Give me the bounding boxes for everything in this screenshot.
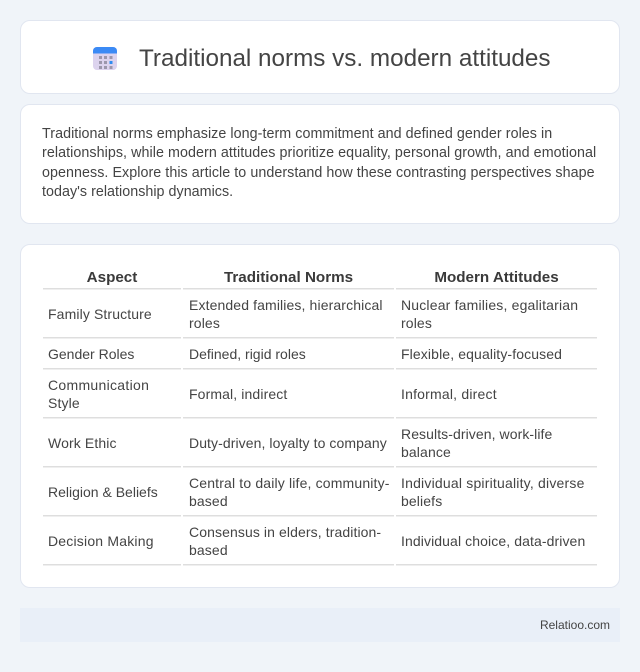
- icon: calendar: [93, 47, 117, 70]
- table: comparison: Flexible, equality-focused: [401, 346, 562, 362]
- row: Work Ethic: Work Ethic: [48, 435, 117, 451]
- row: Communication Style: Communication: [48, 377, 149, 393]
- table: comparison: Informal, direct: [401, 386, 497, 402]
- row: Gender Roles: Gender Roles: [48, 346, 134, 362]
- table: comparison: Results-driven, work-life: [401, 426, 552, 442]
- panel: introduction: [20, 104, 620, 224]
- table: comparison: Extended families, hierarchical: [189, 297, 383, 313]
- table: comparison: roles: [189, 315, 220, 331]
- text block: introduction: today's relationship dynamics.: [42, 184, 233, 200]
- table: comparison: Duty-driven, loyalty to company: [189, 435, 387, 451]
- table: comparison: Style: [48, 395, 80, 411]
- panel: title card: [20, 20, 620, 94]
- row: Religion & Beliefs: Religion & Beliefs: [48, 484, 158, 500]
- table: comparison: roles: [401, 315, 432, 331]
- table: comparison: Nuclear families, egalitarian: [401, 297, 578, 313]
- table: comparison: balance: [401, 444, 451, 460]
- table: comparison: Individual choice, data-driven: [401, 533, 585, 549]
- row: Family Structure: Family Structure: [48, 306, 152, 322]
- text block: introduction: relationships, while modern attitudes prioritize equality, personal growth, and emotional: [42, 145, 596, 161]
- table: comparison: Defined, rigid roles: [189, 346, 306, 362]
- footer: [20, 608, 620, 642]
- table: comparison: Consensus in elders, tradition-: [189, 524, 381, 540]
- footer credit: Relatioo.com: [540, 618, 610, 632]
- text block: introduction: [42, 126, 596, 200]
- table: comparison: based: [189, 493, 228, 509]
- table: comparison: based: [189, 542, 228, 558]
- table: comparison: beliefs: [401, 493, 442, 509]
- text block: introduction: openness. Explore this article to understand how these contrasting perspectives shape: [42, 165, 595, 181]
- row: Decision Making: Decision Making: [48, 533, 154, 549]
- panel: comparison table: [20, 244, 620, 588]
- heading: Aspect: Aspect: [87, 269, 137, 286]
- table: comparison: Formal, indirect: [189, 386, 287, 402]
- table: comparison: [43, 269, 597, 566]
- heading: Modern Attitudes: Modern Attitudes: [434, 269, 559, 286]
- title: Traditional norms vs. modern attitudes: [139, 45, 551, 72]
- table: comparison: Central to daily life, community-: [189, 475, 390, 491]
- table: comparison: Individual spirituality, diverse: [401, 475, 585, 491]
- text block: introduction: Traditional norms emphasize long-term commitment and defined gender roles in: [42, 126, 552, 142]
- heading: Traditional Norms: Traditional Norms: [224, 269, 353, 286]
